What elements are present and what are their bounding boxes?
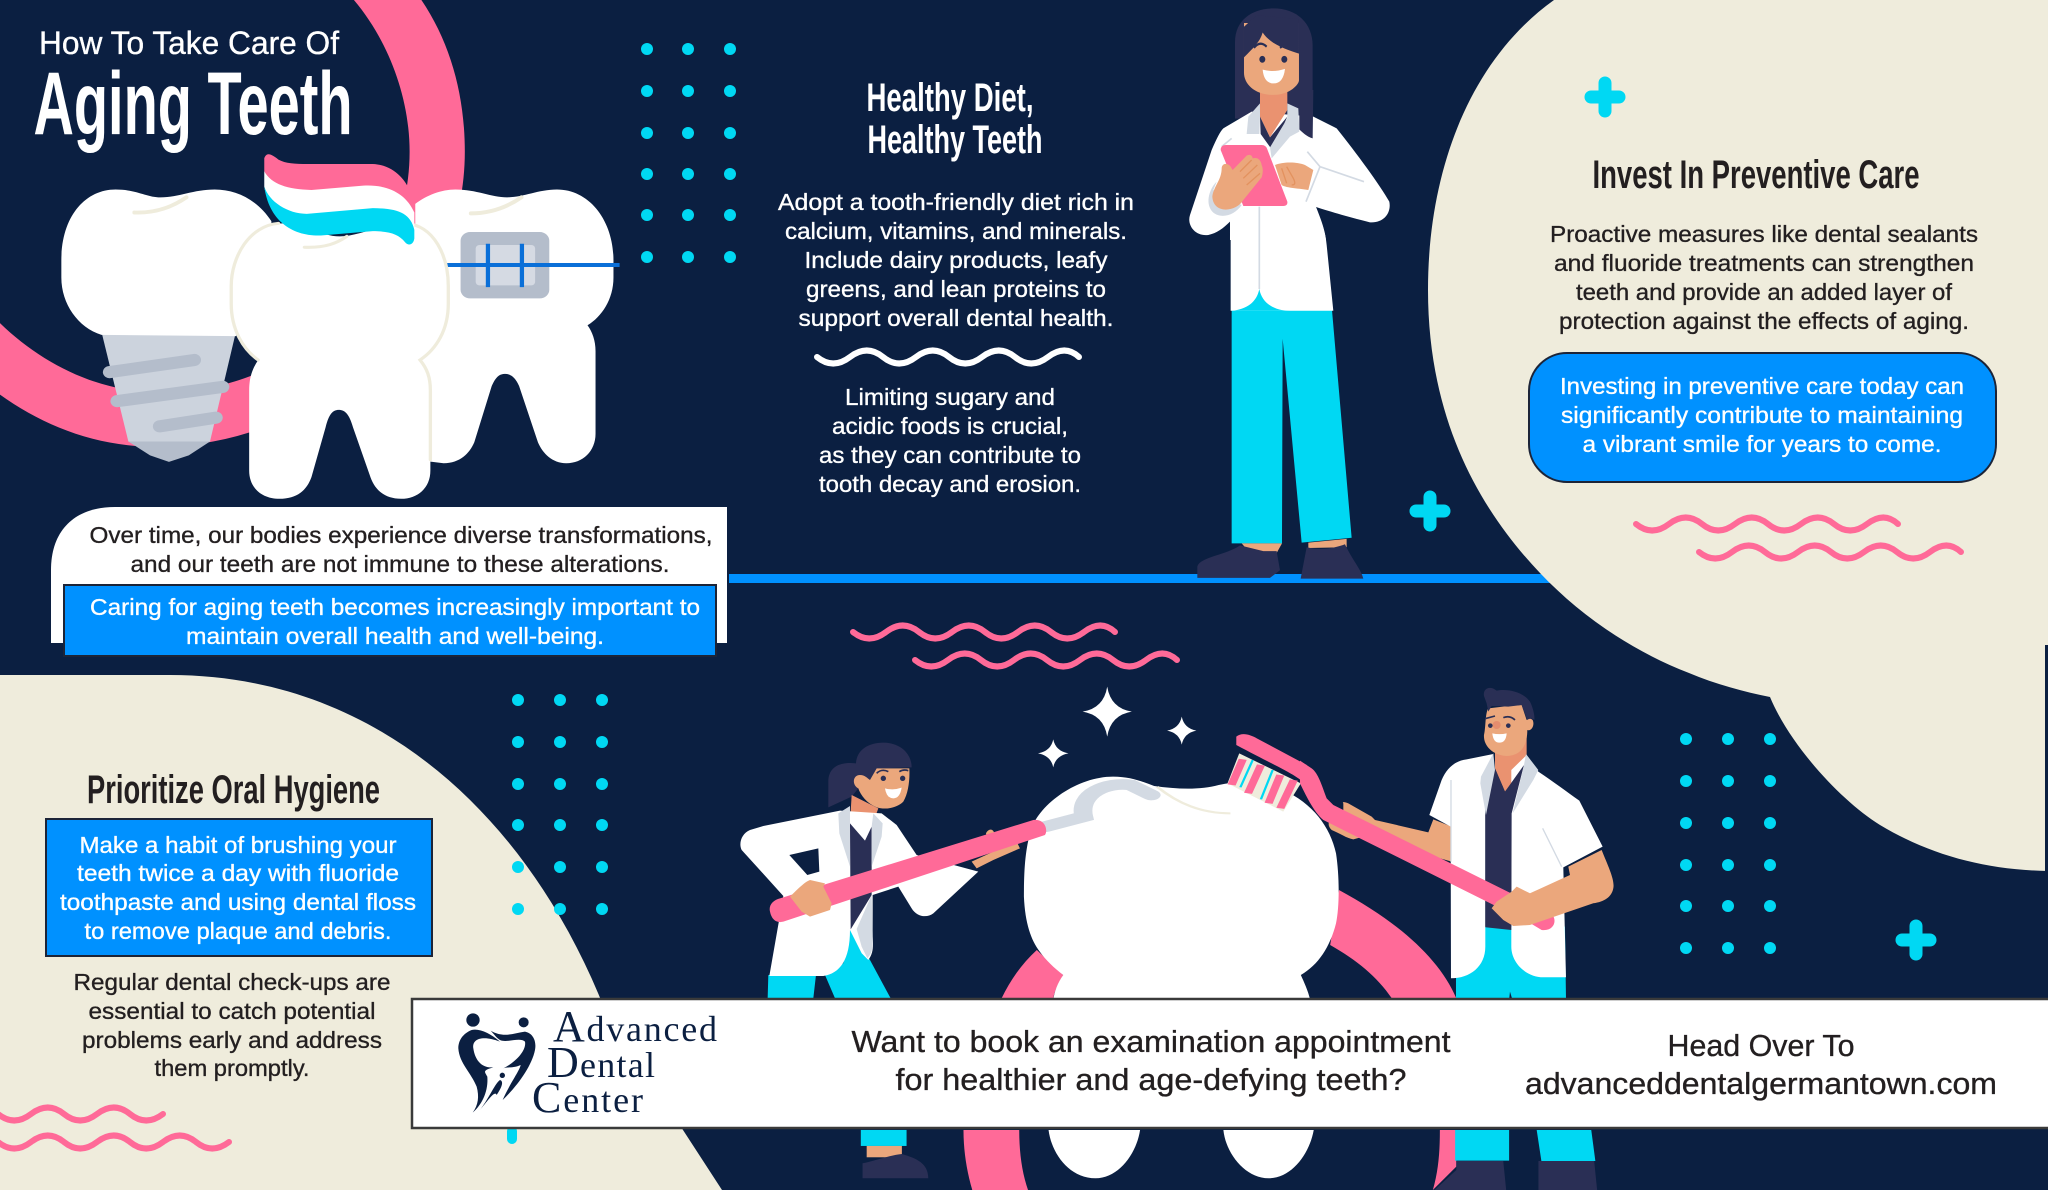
coat seams <box>1451 780 1562 867</box>
right dentist lower legs <box>1435 1130 1597 1190</box>
intro callout: maintain overall health and well-being. <box>186 623 604 649</box>
panel: oral hygiene <box>46 768 432 1081</box>
panel: beige shape bottom left <box>0 675 722 1190</box>
shirt <box>1485 765 1524 930</box>
face <box>854 768 909 809</box>
banner call to action: for healthier and age-defying teeth? <box>896 1062 1406 1097</box>
hands <box>1212 155 1313 210</box>
intro callout <box>64 585 716 656</box>
panel: healthy diet: Healthy Diet, <box>866 76 1034 120</box>
logo wordmark: Dental <box>547 1038 655 1087</box>
face <box>1484 705 1533 756</box>
plus icon: bottom right <box>1902 926 1930 954</box>
back arm <box>1329 802 1452 862</box>
banner <box>412 999 2048 1128</box>
plus stub under banner <box>507 1126 517 1144</box>
neck <box>1260 87 1287 137</box>
oral hygiene callout: to remove plaque and debris. <box>84 918 392 944</box>
right bristles <box>1227 753 1301 812</box>
tooth with brace <box>415 190 620 463</box>
right brush head <box>1236 734 1307 787</box>
pink waves: top right <box>1636 518 1961 558</box>
preventive care callout <box>1529 353 1996 482</box>
panel: healthy diet: as they can contribute to <box>819 442 1081 468</box>
title <box>34 25 352 153</box>
toothpaste swirl <box>264 154 414 245</box>
banner website: Head Over To <box>1668 1028 1854 1063</box>
logo wordmark: Advanced <box>553 1002 717 1051</box>
near hand <box>790 880 832 917</box>
sparkles <box>1038 687 1196 767</box>
panel: healthy diet: calcium, vitamins, and minerals. <box>785 218 1127 244</box>
title: Aging Teeth <box>34 53 352 153</box>
cuff <box>1209 182 1242 216</box>
panel: healthy diet: Limiting sugary and <box>845 384 1055 410</box>
preventive care callout: significantly contribute to maintaining <box>1561 402 1963 428</box>
front arm and hand <box>1492 850 1614 926</box>
divider line <box>729 574 1564 583</box>
oral hygiene callout: toothpaste and using dental floss <box>60 889 416 915</box>
panel: healthy diet: greens, and lean proteins to <box>806 276 1106 302</box>
panel: healthy diet: Adopt a tooth-friendly diet rich in <box>778 189 1134 215</box>
plus icon: top right <box>1591 83 1619 111</box>
banner call to action: Want to book an examination appointment <box>852 1024 1451 1059</box>
left brush neck <box>1046 784 1151 827</box>
arm gap <box>789 848 819 875</box>
logo wordmark: Center <box>532 1073 643 1122</box>
panel: preventive care: Proactive measures like dental sealants <box>1550 221 1978 247</box>
white wave <box>817 350 1079 364</box>
pink ring <box>0 0 465 447</box>
lower coat <box>1231 191 1333 311</box>
panel: preventive care: teeth and provide an added layer of <box>1576 279 1953 305</box>
coat seam <box>1257 207 1262 289</box>
centre tooth <box>231 223 448 499</box>
collar <box>1247 103 1299 158</box>
banner call to action <box>852 1024 1451 1097</box>
tablet <box>1221 145 1287 206</box>
features <box>1485 716 1515 743</box>
trousers <box>1232 306 1352 543</box>
lower body <box>1197 8 1363 579</box>
preventive care callout: Investing in preventive care today can <box>1560 373 1964 399</box>
logo mark <box>458 1013 535 1113</box>
features <box>877 770 908 798</box>
banner website <box>1525 1028 1997 1101</box>
coat seams <box>1222 138 1364 240</box>
plus icon: centre <box>1416 497 1444 525</box>
panel: healthy diet: tooth decay and erosion. <box>819 471 1081 497</box>
upper body <box>1189 87 1390 240</box>
coat <box>740 811 978 976</box>
panel: beige shape top right <box>1428 0 2048 871</box>
panel: healthy diet: support overall dental health. <box>798 305 1114 331</box>
face <box>1244 23 1299 95</box>
pink waves: bottom left <box>0 1108 229 1148</box>
intro text box <box>51 507 727 656</box>
illustration: standing dentist <box>1189 8 1390 579</box>
hair strip <box>1288 90 1313 138</box>
head <box>1244 15 1299 95</box>
oral hygiene callout <box>46 819 432 956</box>
intro callout: Caring for aging teeth becomes increasingly important to <box>90 594 700 620</box>
title: How To Take Care Of <box>39 25 339 61</box>
toothbrush handle <box>1300 761 1555 930</box>
dots: right <box>1680 733 1776 954</box>
tooth crease <box>1157 787 1230 813</box>
oral hygiene callout: teeth twice a day with fluoride <box>77 860 399 886</box>
big tooth <box>1024 777 1339 1000</box>
neck <box>1495 737 1527 792</box>
illustration: brushing scene <box>740 687 1614 1190</box>
intro text box: Over time, our bodies experience diverse transformations, <box>90 522 712 548</box>
trousers <box>1456 927 1566 998</box>
panel: oral hygiene: essential to catch potential <box>88 998 376 1024</box>
dots: middle left <box>512 694 608 915</box>
logo <box>458 1002 717 1122</box>
ankles <box>1242 539 1347 553</box>
right dentist <box>1300 688 1614 998</box>
left brush handle <box>770 820 1046 922</box>
left dentist lower leg <box>861 1130 928 1178</box>
panel: preventive care <box>1529 153 1996 482</box>
neck <box>850 795 878 841</box>
pink waves: centre <box>853 626 1177 666</box>
illustration: teeth group <box>0 0 620 499</box>
pink ring behind big tooth <box>963 890 1456 1190</box>
preventive care callout: a vibrant smile for years to come. <box>1582 431 1942 457</box>
collar <box>1480 753 1538 815</box>
shirt <box>1260 117 1287 151</box>
panel: oral hygiene: problems early and address <box>82 1027 382 1053</box>
collar <box>838 806 883 958</box>
shirt <box>850 823 872 929</box>
right edge stripe <box>2045 645 2048 871</box>
trousers <box>768 928 891 998</box>
coat <box>1429 754 1603 978</box>
shoes <box>1197 544 1363 579</box>
big tooth and sparkles <box>861 687 1597 1190</box>
oral hygiene callout: Make a habit of brushing your <box>80 832 397 858</box>
big tooth roots <box>1049 1130 1314 1178</box>
hair back <box>1235 8 1313 119</box>
panel: preventive care: and fluoride treatments can strengthen <box>1554 250 1974 276</box>
panel: oral hygiene: them promptly. <box>154 1055 310 1081</box>
coat hem notch <box>1232 289 1290 311</box>
panel: oral hygiene: Regular dental check-ups are <box>74 969 390 995</box>
panel: healthy diet: acidic foods is crucial, <box>832 413 1068 439</box>
hair <box>1484 688 1534 720</box>
fringe <box>1244 15 1299 57</box>
tooth with implant <box>61 190 274 336</box>
banner website: advanceddentalgermantown.com <box>1525 1066 1997 1101</box>
smile <box>1263 69 1285 83</box>
panel: oral hygiene: Prioritize Oral Hygiene <box>87 768 380 812</box>
upper coat <box>1189 112 1390 240</box>
implant post <box>101 332 236 462</box>
left dentist <box>740 743 1046 998</box>
panel: preventive care: protection against the effects of aging. <box>1559 308 1969 334</box>
panel: healthy diet: Include dairy products, leafy <box>804 247 1108 273</box>
intro text box: and our teeth are not immune to these alterations. <box>130 551 670 577</box>
hair <box>828 743 912 807</box>
forearm and far hand <box>972 830 1020 868</box>
panel: healthy diet: Healthy Teeth <box>868 118 1042 162</box>
panel: healthy diet <box>778 76 1134 497</box>
dots: top <box>641 43 736 263</box>
logo wordmark <box>532 1002 717 1122</box>
eyes and eyebrows <box>1254 44 1288 63</box>
